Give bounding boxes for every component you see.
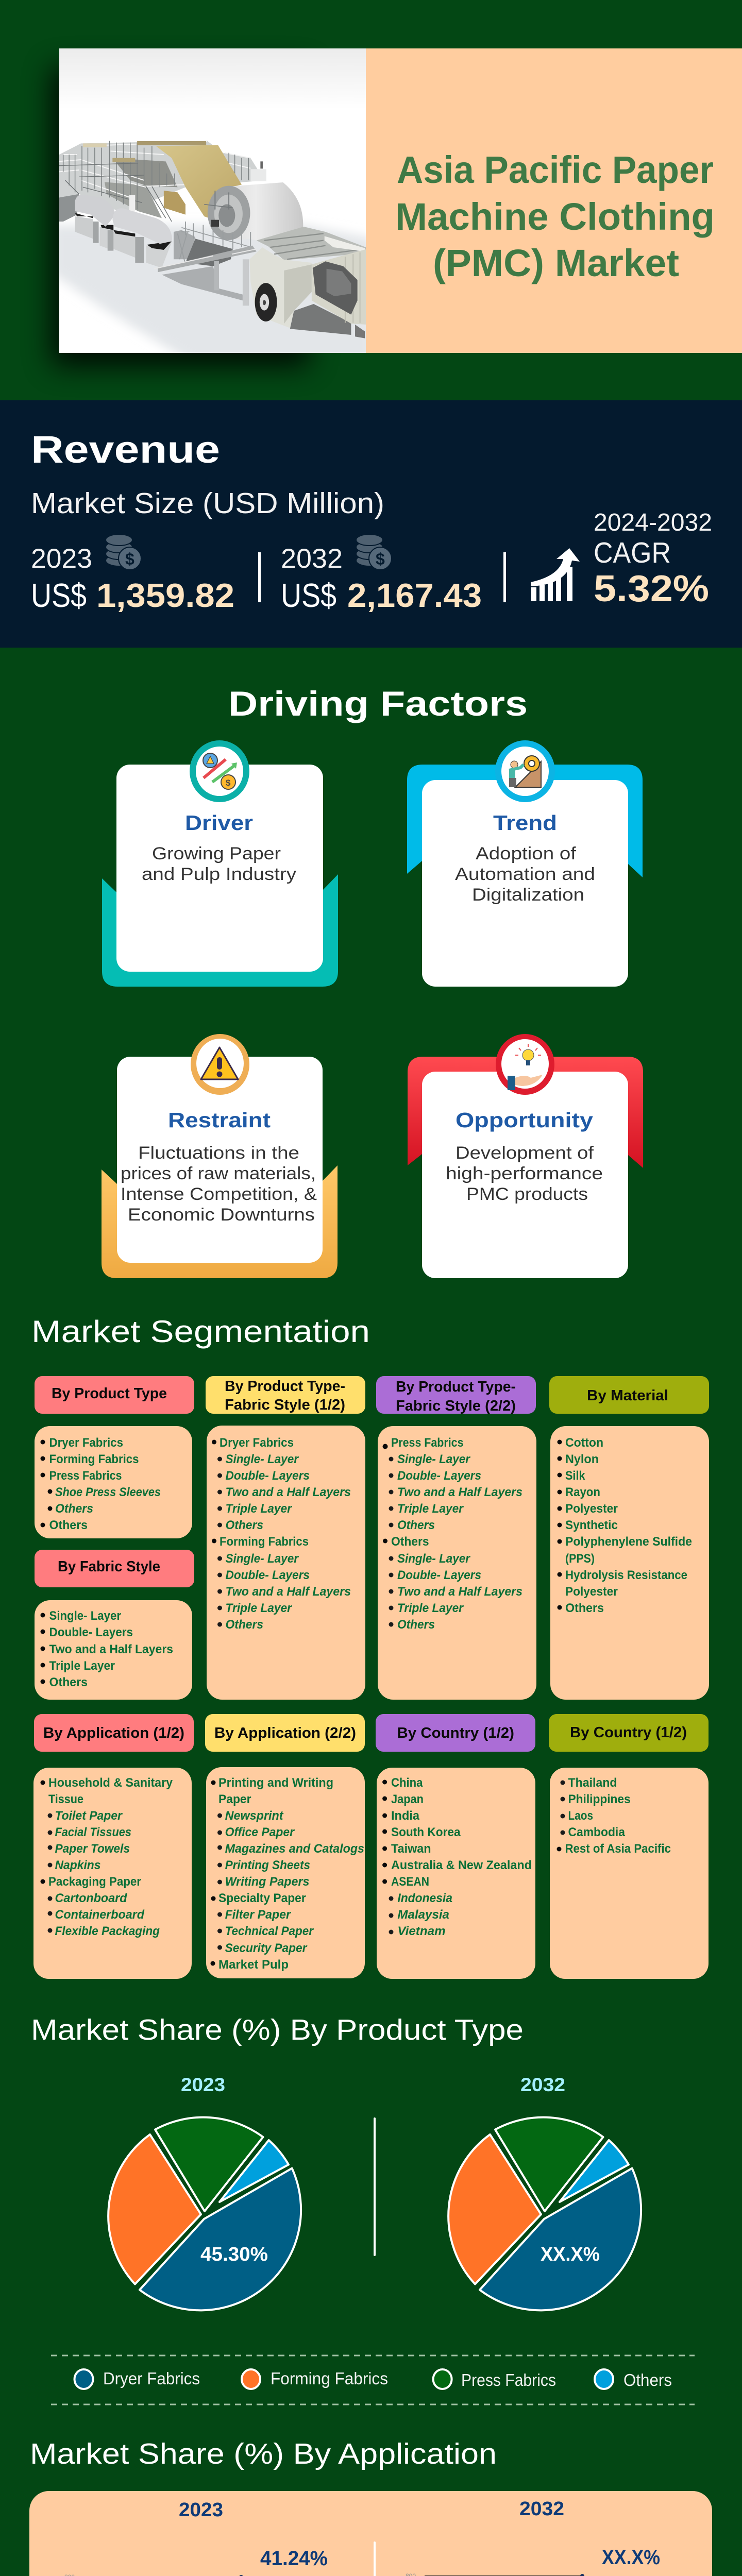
- panel: fabric style 1/2 list: Two and a Half Layers: [226, 1485, 351, 1499]
- panel: application 2/2 list: Magazines and Catalogs: [225, 1842, 364, 1856]
- title: Machine Clothing: [395, 195, 715, 238]
- panel: fabric style list: Two and a Half Layers: [49, 1642, 173, 1656]
- panel: fabric style list: [35, 1600, 192, 1700]
- label: 2023: 2023: [181, 2074, 225, 2095]
- panel: material list: Synthetic: [565, 1518, 618, 1532]
- panel: fabric style 1/2 list: Triple Layer: [226, 1601, 293, 1615]
- panel: fabric style 2/2 list: [378, 1426, 536, 1700]
- panel: application 2/2 list: Filter Paper: [225, 1908, 292, 1922]
- panel: fabric style 2/2 list: Two and a Half Layers: [397, 1485, 522, 1499]
- divider: [503, 552, 506, 602]
- panel: application 1/2 list: Flexible Packaging: [55, 1924, 160, 1938]
- panel: country list: Japan: [391, 1792, 424, 1806]
- text: driver: Growing Paper: [152, 844, 281, 863]
- panel: country list: South Korea: [391, 1825, 461, 1839]
- panel: fabric style 1/2 list: Double- Layers: [226, 1469, 310, 1483]
- panel: fabric style 1/2 list: Forming Fabrics: [220, 1535, 309, 1549]
- stat: CAGR: 2024-2032: [594, 509, 712, 536]
- heading: driving factors: Driving Factors: [228, 684, 528, 723]
- stat: 2032: US$: [281, 577, 336, 614]
- panel: application 2/2 list: [206, 1767, 365, 1978]
- heading: revenue: Revenue: [31, 428, 220, 471]
- panel: application 2/2 list: Security Paper: [225, 1941, 308, 1955]
- divider: [258, 552, 261, 602]
- panel: fabric style 2/2 list: Others: [391, 1535, 429, 1549]
- text: restraint: [121, 1143, 317, 1225]
- value: XX.X%: XX.X%: [541, 2244, 600, 2265]
- panel: application 2/2 list: Printing and Writing: [218, 1776, 333, 1790]
- panel: country list: Malaysia: [397, 1908, 449, 1922]
- heading: opportunity: Opportunity: [456, 1108, 593, 1132]
- panel: fabric style 2/2 list: Single- Layer: [397, 1552, 471, 1566]
- text: opportunity: high-performance: [446, 1164, 603, 1183]
- stat: 2023: 1,359.82: [96, 577, 234, 614]
- panel: application 1/2 list: Paper Towels: [55, 1842, 130, 1856]
- legend: product type: Press Fabrics: [461, 2370, 556, 2389]
- header: country 1/2 second: By Country (1/2): [570, 1724, 687, 1741]
- text: restraint: Economic Downturns: [128, 1205, 315, 1225]
- panel: product type list: [35, 1426, 192, 1538]
- divider: [374, 2117, 376, 2256]
- panel: country list continued: Laos: [568, 1809, 593, 1823]
- text: opportunity: [446, 1143, 603, 1204]
- pie chart: 2023: [108, 2074, 301, 2310]
- panel: application charts: [29, 2491, 712, 2576]
- value: XX.X%: XX.X%: [602, 2546, 660, 2569]
- text: trend: Adoption of: [476, 844, 577, 863]
- header: fabric style 2/2: Fabric Style (2/2): [396, 1398, 516, 1414]
- panel: product type list: Others: [49, 1518, 88, 1532]
- panel: country list: Australia & New Zealand: [391, 1858, 532, 1872]
- stat: 2032: [281, 544, 482, 614]
- panel: material list: Hydrolysis Resistance: [565, 1568, 687, 1582]
- bar chart: 2023: [64, 2573, 304, 2576]
- heading: market share by application: Market Share (%) By Application: [30, 2437, 497, 2470]
- panel: product type list: Dryer Fabrics: [49, 1436, 123, 1450]
- stat: 2023: [31, 544, 234, 614]
- panel: fabric style 2/2 list: Others: [397, 1618, 435, 1632]
- panel: country list: Taiwan: [391, 1842, 431, 1856]
- panel: country list: China: [391, 1776, 423, 1790]
- value: 45.30%: 45.30%: [200, 2244, 268, 2265]
- text: driver: [142, 844, 296, 884]
- panel: application 2/2 list: Paper: [218, 1792, 251, 1806]
- panel: application 2/2 list: Newsprint: [225, 1809, 284, 1823]
- panel: country list: ASEAN: [391, 1875, 429, 1889]
- text: trend: Automation and: [455, 865, 595, 884]
- panel: material list: Polyester: [565, 1585, 618, 1599]
- panel: application 2/2 list: Writing Papers: [225, 1875, 309, 1889]
- legend: product type: Dryer Fabrics: [103, 2369, 200, 2388]
- header: by material: [549, 1376, 709, 1414]
- header: application 1/2: By Application (1/2): [43, 1725, 184, 1741]
- panel: application 1/2 list: Packaging Paper: [48, 1875, 141, 1889]
- panel: material list: [550, 1426, 709, 1700]
- panel: country list: Indonesia: [397, 1891, 452, 1905]
- title: [395, 148, 715, 284]
- pie chart: 2032: [448, 2074, 641, 2310]
- heading: driver: Driver: [185, 811, 253, 835]
- panel: fabric style 2/2 list: Others: [397, 1518, 435, 1532]
- heading: trend: Trend: [493, 811, 557, 835]
- panel: country list continued: Philippines: [568, 1792, 631, 1806]
- title: (PMC) Market: [433, 242, 679, 284]
- icon: trend: [509, 756, 541, 787]
- panel: revenue: [0, 400, 742, 648]
- panel: fabric style 2/2 list: Double- Layers: [397, 1469, 481, 1483]
- panel: application 2/2 list: Technical Paper: [225, 1924, 314, 1938]
- header: by product type: By Product Type: [52, 1385, 167, 1402]
- panel: product type list: Shoe Press Sleeves: [55, 1485, 161, 1499]
- header: fabric style 2/2: By Product Type-: [396, 1379, 516, 1395]
- panel: fabric style 2/2 list: Press Fabrics: [391, 1436, 464, 1450]
- stat: CAGR: CAGR: [594, 536, 671, 569]
- panel: application 1/2 list: Household & Sanitary: [48, 1776, 173, 1790]
- header: application 2/2: By Application (2/2): [214, 1725, 356, 1741]
- machine illustration: [59, 48, 366, 353]
- legend: product type: Forming Fabrics: [271, 2369, 388, 2388]
- panel: product type list: Press Fabrics: [49, 1469, 122, 1483]
- subheading: market size: Market Size (USD Million): [31, 487, 384, 520]
- label: 2032: 2032: [520, 2074, 565, 2095]
- bar chart: 2032: [406, 2572, 645, 2576]
- icon: growth arrow: [531, 548, 580, 601]
- text: restraint: prices of raw materials,: [121, 1164, 316, 1183]
- panel: fabric style 1/2 list: Others: [226, 1618, 263, 1632]
- header: application 2/2: [205, 1714, 365, 1752]
- header: application 1/2: [34, 1714, 194, 1752]
- icon: coins 2032: $: [376, 550, 385, 568]
- panel: application 2/2 list: Specialty Paper: [218, 1891, 306, 1905]
- panel: application 1/2 list: Toilet Paper: [55, 1809, 123, 1823]
- text: driver: and Pulp Industry: [142, 865, 296, 884]
- panel: country list: Vietnam: [397, 1924, 446, 1938]
- text: restraint: Fluctuations in the: [138, 1143, 299, 1163]
- panel: country list continued: [550, 1768, 709, 1979]
- panel: fabric style list: Triple Layer: [49, 1659, 115, 1673]
- panel: restraint: [102, 1034, 338, 1278]
- heading: market share by product type: Market Share (%) By Product Type: [31, 2013, 524, 2046]
- icon: warning: [201, 1047, 238, 1079]
- hero panel: [52, 48, 742, 369]
- panel: country list continued: Rest of Asia Pacific: [565, 1842, 671, 1856]
- panel: fabric style 1/2 list: Triple Layer: [226, 1502, 293, 1516]
- panel: application 2/2 list: Market Pulp: [218, 1958, 289, 1972]
- title: Asia Pacific Paper: [397, 148, 714, 191]
- header: by fabric style: [35, 1550, 194, 1587]
- panel: material list: Rayon: [565, 1485, 600, 1499]
- panel: trend: [407, 740, 643, 987]
- panel: fabric style list: Double- Layers: [49, 1625, 133, 1639]
- panel: country list continued: Thailand: [568, 1776, 617, 1790]
- icon: driver: $: [226, 778, 231, 788]
- panel: application 1/2 list: Napkins: [55, 1858, 101, 1872]
- stat: CAGR: [594, 509, 712, 609]
- stat: 2023: 2023: [31, 544, 92, 574]
- panel: country list continued: Cambodia: [568, 1825, 626, 1839]
- header: fabric style 1/2: [206, 1376, 365, 1414]
- panel: material list: Nylon: [565, 1452, 599, 1466]
- panel: material list: Silk: [565, 1469, 585, 1483]
- icon: coins 2023: $: [125, 550, 134, 568]
- panel: fabric style 2/2 list: Double- Layers: [397, 1568, 481, 1582]
- header: fabric style 1/2: Fabric Style (1/2): [225, 1397, 345, 1413]
- header: by material: By Material: [587, 1387, 668, 1404]
- panel: fabric style 1/2 list: Single- Layer: [226, 1552, 299, 1566]
- panel: country list: [377, 1768, 535, 1979]
- stat: 2032: 2,167.43: [347, 577, 482, 614]
- panel: application 1/2 list: Containerboard: [55, 1908, 145, 1922]
- panel: fabric style 2/2 list: Triple Layer: [397, 1601, 464, 1615]
- header: by fabric style: By Fabric Style: [58, 1558, 160, 1575]
- header: country 1/2 second: [549, 1714, 709, 1752]
- text: trend: Digitalization: [472, 885, 584, 905]
- icon: driver: [203, 753, 237, 789]
- panel: fabric style 2/2 list: Single- Layer: [397, 1452, 471, 1466]
- panel: country list: India: [391, 1809, 420, 1823]
- text: opportunity: PMC products: [466, 1184, 588, 1204]
- panel: product type list: Forming Fabrics: [49, 1452, 139, 1466]
- panel: material list: Cotton: [565, 1436, 603, 1450]
- icon: opportunity: [508, 1044, 543, 1090]
- title panel: [366, 48, 742, 353]
- panel: fabric style 1/2 list: Two and a Half Layers: [226, 1585, 351, 1599]
- panel: application 1/2 list: Tissue: [48, 1792, 83, 1806]
- panel: opportunity: [408, 1034, 643, 1278]
- panel: fabric style list: Others: [49, 1675, 88, 1689]
- panel: fabric style 2/2 list: Two and a Half Layers: [397, 1585, 522, 1599]
- stat: CAGR: 5.32%: [594, 568, 709, 609]
- panel: driver: [102, 740, 338, 987]
- panel: product type list: Others: [55, 1502, 93, 1516]
- panel: material list: Polyphenylene Sulfide: [565, 1535, 692, 1549]
- header: fabric style 1/2: By Product Type-: [225, 1378, 345, 1395]
- text: opportunity: Development of: [456, 1143, 594, 1163]
- panel: application 1/2 list: Cartonboard: [55, 1891, 128, 1905]
- legend: product type: Others: [623, 2370, 672, 2389]
- panel: fabric style 2/2 list: Triple Layer: [397, 1502, 464, 1516]
- panel: fabric style 1/2 list: Dryer Fabrics: [220, 1436, 294, 1450]
- panel: application 1/2 list: [33, 1768, 192, 1979]
- stat: 2032: 2032: [281, 544, 343, 574]
- legend: product type: [74, 2369, 672, 2389]
- heading: restraint: Restraint: [168, 1108, 271, 1132]
- header: by product type: [35, 1376, 194, 1414]
- panel: fabric style 1/2 list: Others: [226, 1518, 263, 1532]
- icon: coins 2023: [106, 534, 141, 570]
- panel: fabric style list: Single- Layer: [49, 1609, 121, 1623]
- panel: application 2/2 list: Printing Sheets: [225, 1858, 310, 1872]
- divider: [374, 2541, 376, 2576]
- panel: material list: (PPS): [565, 1552, 595, 1566]
- label: 2023: 2023: [179, 2499, 223, 2521]
- panel: fabric style 1/2 list: Single- Layer: [226, 1452, 299, 1466]
- value: 41.24%: 41.24%: [260, 2547, 328, 2570]
- icon: coins 2032: [356, 534, 392, 570]
- panel: application 1/2 list: Facial Tissues: [55, 1825, 131, 1839]
- panel: fabric style 1/2 list: [207, 1426, 365, 1700]
- text: trend: [455, 844, 595, 905]
- stat: 2023: US$: [31, 577, 87, 614]
- label: 2032: 2032: [519, 2498, 564, 2520]
- panel: application 2/2 list: Office Paper: [225, 1825, 295, 1839]
- panel: material list: Others: [565, 1601, 604, 1615]
- panel: material list: Polyester: [565, 1502, 618, 1516]
- heading: market segmentation: Market Segmentation: [31, 1314, 370, 1349]
- header: country 1/2: By Country (1/2): [397, 1725, 514, 1741]
- header: country 1/2: [376, 1714, 535, 1752]
- panel: fabric style 1/2 list: Double- Layers: [226, 1568, 310, 1582]
- header: fabric style 2/2: [376, 1376, 536, 1414]
- text: restraint: Intense Competition, &: [121, 1184, 317, 1204]
